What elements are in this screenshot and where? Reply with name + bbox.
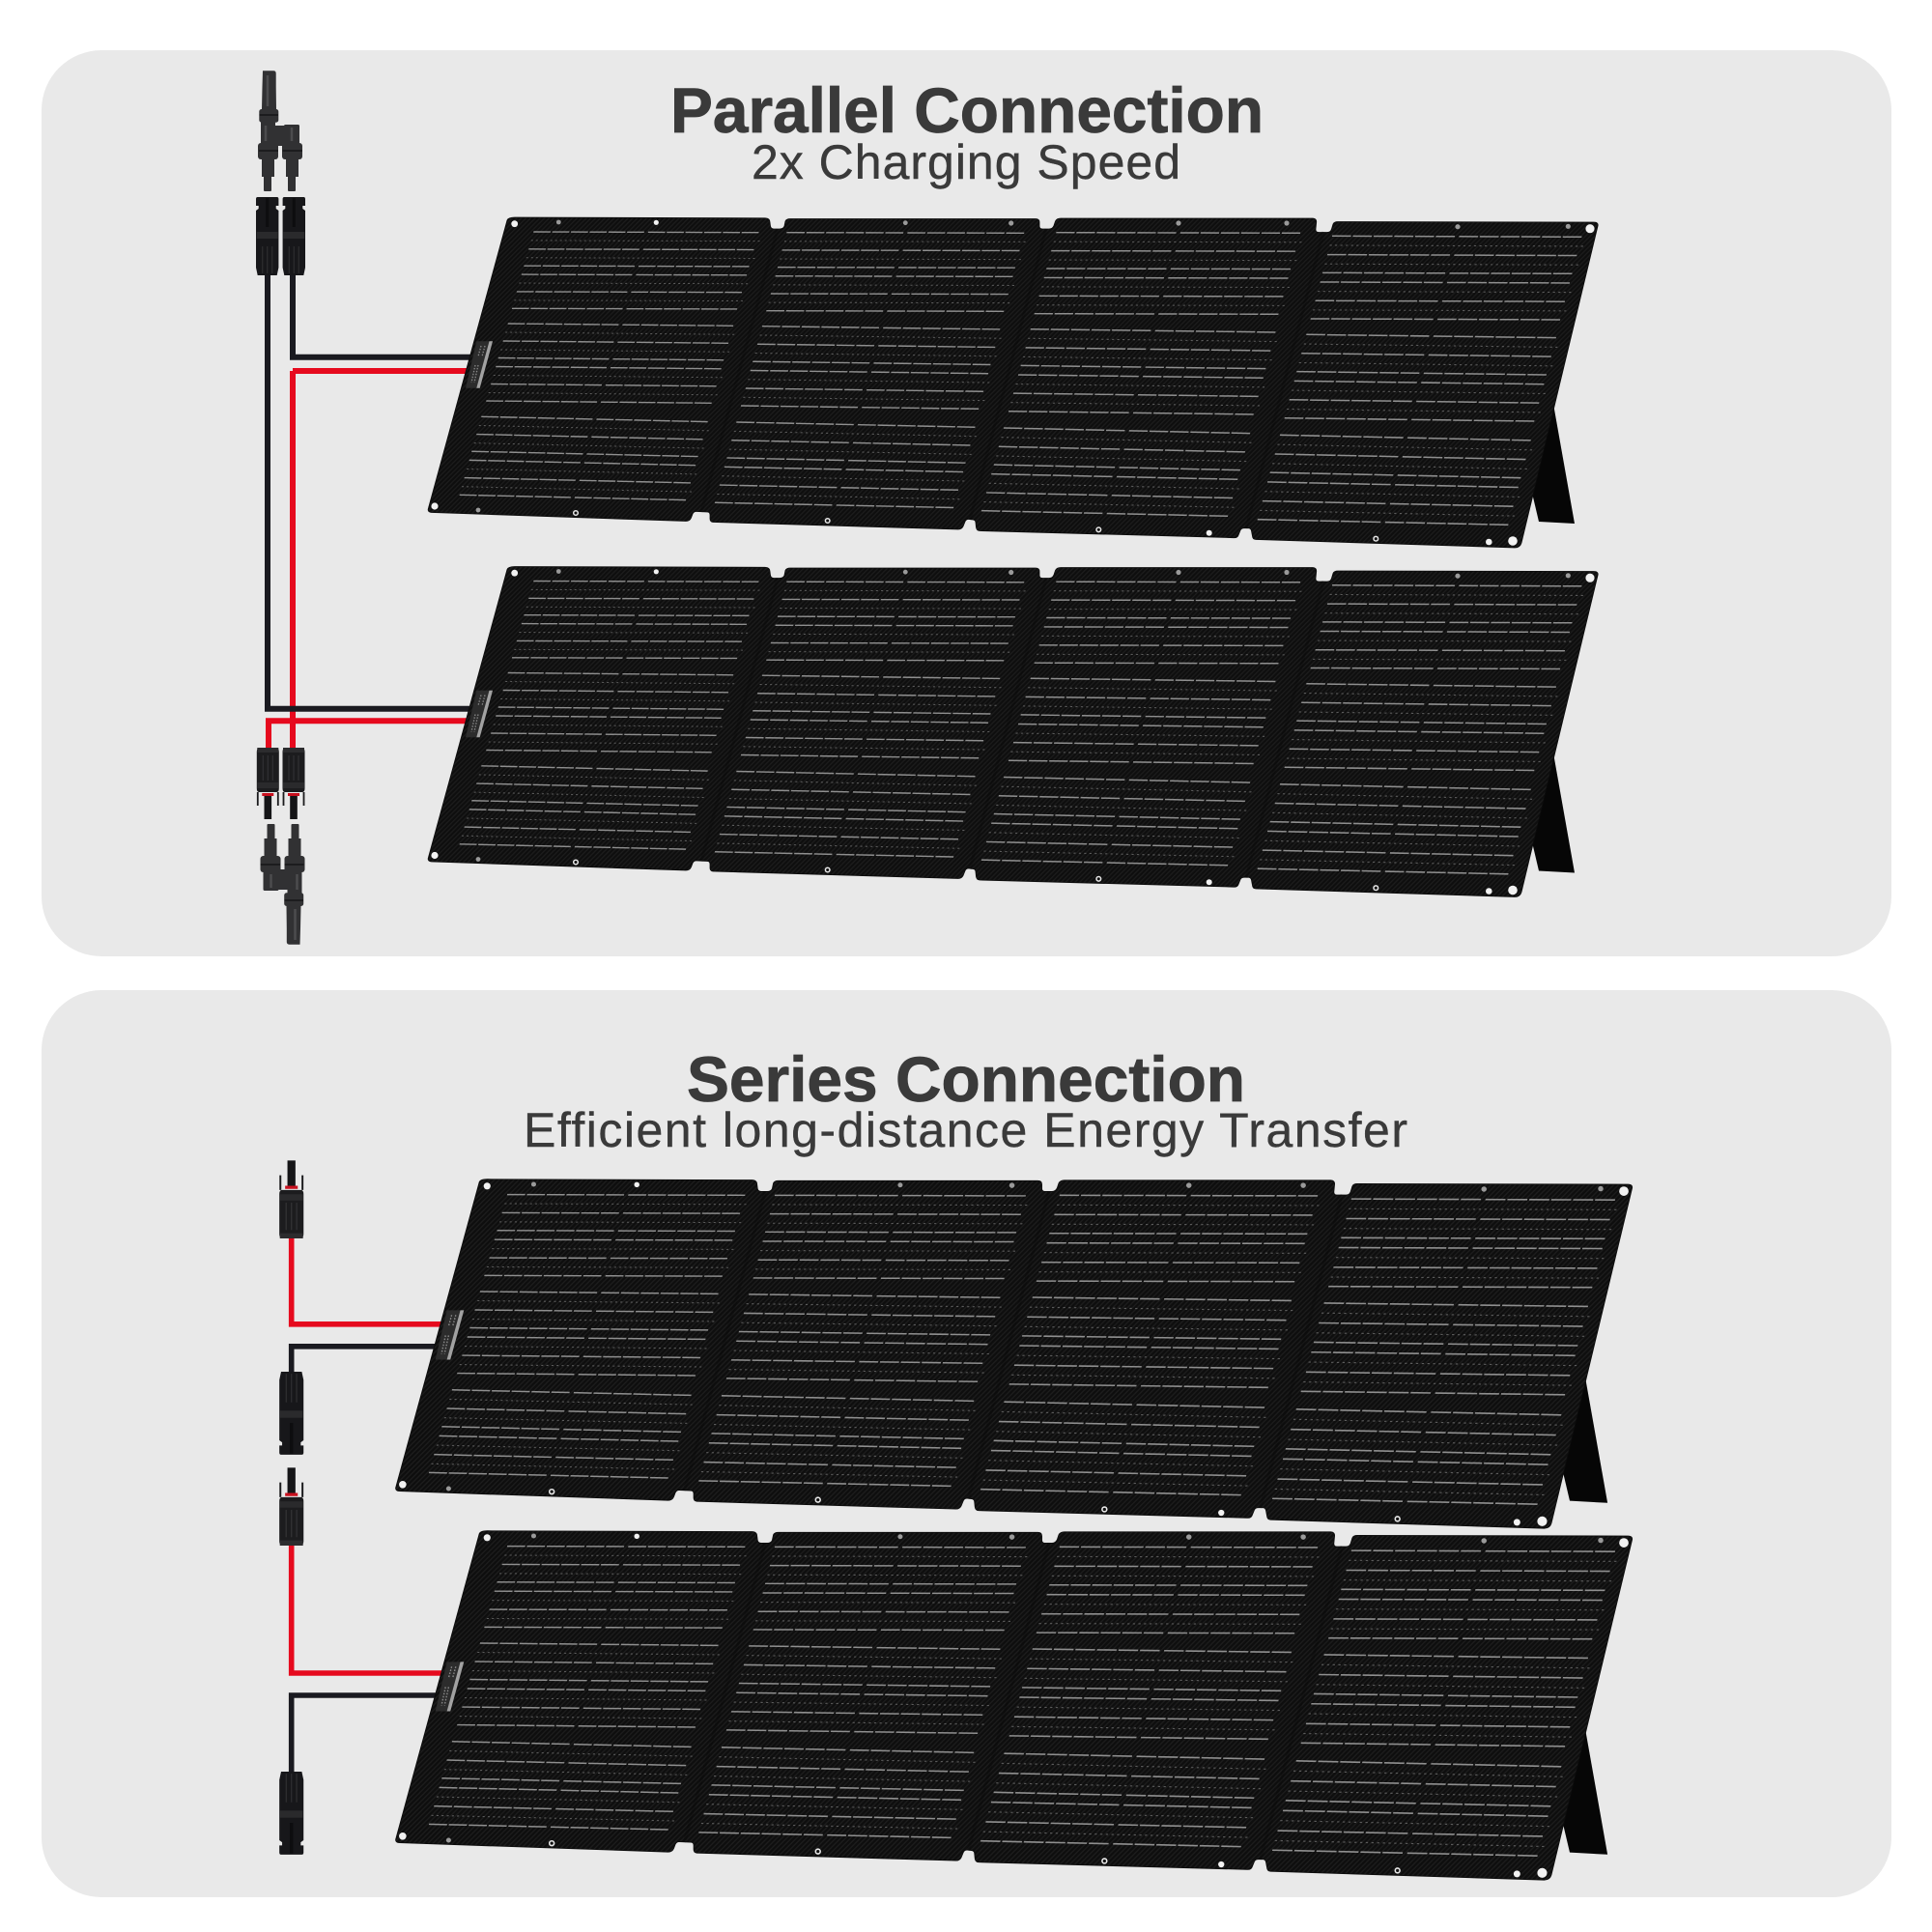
subtitle: long-distance transfer: Efficient long-distance Energy Transfer — [524, 1103, 1407, 1157]
connector: series second female plug — [279, 1772, 303, 1855]
subtitle: charging speed: 2x Charging Speed — [752, 135, 1180, 189]
title: series connection: Series Connection — [687, 1043, 1245, 1115]
connector: bottom right male plug — [282, 748, 305, 819]
panel: parallel connection background — [42, 50, 1891, 956]
solar panel: parallel bottom — [428, 566, 1598, 896]
wiring: parallel connection cables — [268, 275, 475, 749]
solar panel: series bottom — [396, 1531, 1633, 1880]
connector: bottom Y branch — [261, 824, 305, 945]
connector: series second male plug — [279, 1467, 303, 1546]
wiring: series connection cables — [292, 1238, 446, 1776]
title: parallel connection: Parallel Connection — [670, 74, 1264, 146]
connector: top Y branch — [258, 71, 302, 191]
connector: series first female plug — [279, 1372, 303, 1455]
connector: top left female plug — [256, 197, 278, 275]
solar panel: series top — [396, 1179, 1633, 1528]
panel: series connection background — [42, 990, 1891, 1897]
connector: top right female plug — [283, 197, 305, 275]
connector: series first male plug — [279, 1160, 303, 1238]
connector: bottom left male plug — [257, 748, 279, 819]
solar panel: parallel top — [428, 217, 1598, 548]
